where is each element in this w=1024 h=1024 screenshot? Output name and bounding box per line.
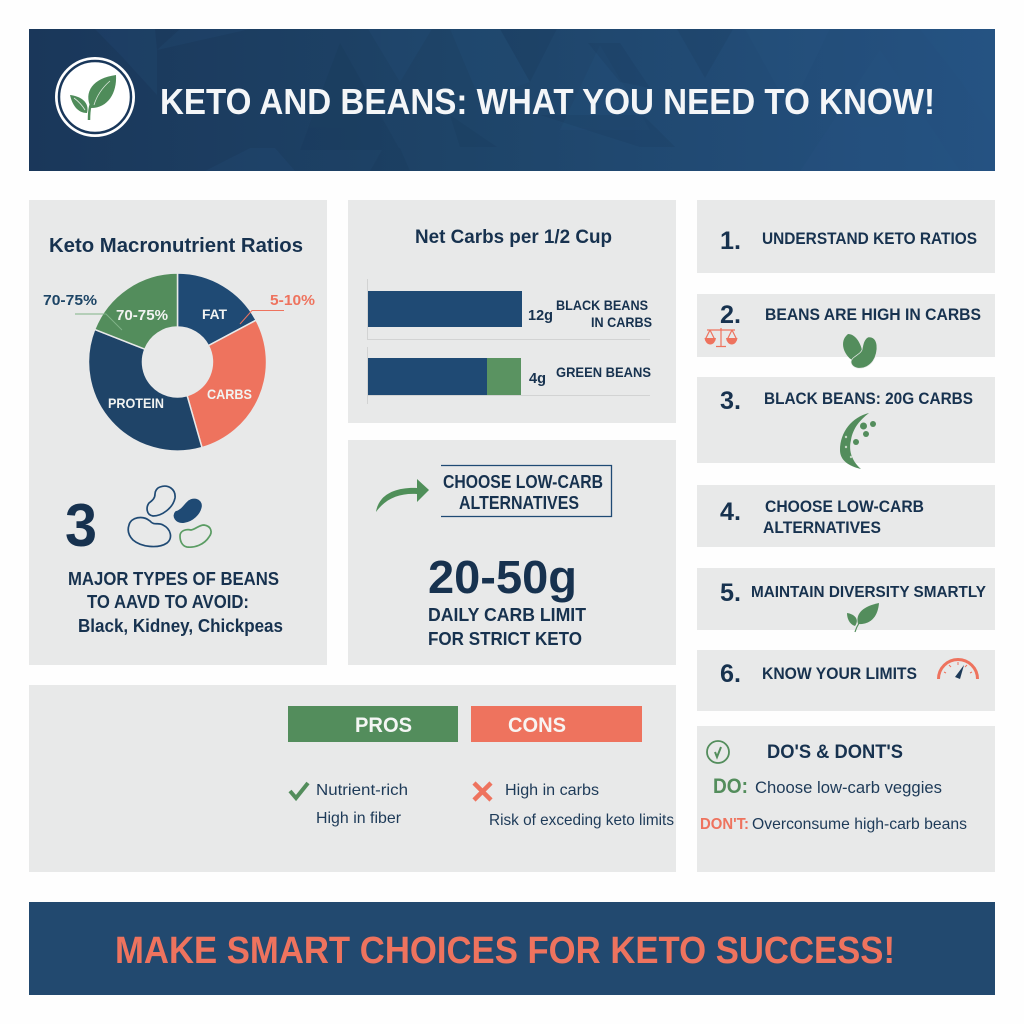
pros list bbox=[316, 782, 408, 827]
panel: keto macronutrient ratios bbox=[29, 200, 327, 665]
bar chart bbox=[368, 279, 652, 404]
do line: Choose low-carb veggies bbox=[755, 778, 942, 797]
donut labels bbox=[108, 306, 252, 411]
panel: step 4 bbox=[697, 485, 995, 547]
callout: 70-75% bbox=[43, 292, 122, 330]
icon: scale bbox=[704, 328, 738, 346]
donut labels: FAT bbox=[202, 306, 227, 322]
donut chart bbox=[88, 273, 267, 451]
do line: DO: bbox=[713, 775, 748, 798]
callout: 5-10%: 5-10% bbox=[270, 292, 315, 309]
do line bbox=[713, 775, 942, 798]
pros list: High in fiber bbox=[316, 810, 402, 827]
panel: step 4: ALTERNATIVES bbox=[763, 518, 881, 537]
icon: gauge bbox=[938, 660, 978, 679]
panel: step 3: 3. bbox=[720, 387, 741, 415]
bar: black beans bbox=[368, 291, 652, 330]
don't line: Overconsume high-carb beans bbox=[752, 816, 967, 833]
bar: black beans: IN CARBS bbox=[591, 314, 652, 330]
footer text: MAKE SMART CHOICES FOR KETO SUCCESS! bbox=[115, 930, 895, 972]
bar: black beans: 12g bbox=[528, 307, 553, 324]
donut labels: 70-75% bbox=[116, 307, 168, 324]
icon: beans bbox=[128, 486, 211, 547]
bar: green beans bbox=[368, 358, 651, 395]
icon: beans bbox=[843, 334, 877, 368]
pros list: Nutrient-rich bbox=[316, 782, 408, 799]
text: major types of beans: MAJOR TYPES OF BEANS bbox=[68, 569, 279, 589]
panel: net carbs bar chart bbox=[348, 200, 676, 423]
cons header: CONS bbox=[508, 714, 566, 737]
panel: step 4: 4. bbox=[720, 498, 741, 526]
donut labels: CARBS bbox=[207, 386, 252, 402]
callout: 70-75%: 70-75% bbox=[43, 292, 97, 309]
panel: step 2: BEANS ARE HIGH IN CARBS bbox=[765, 305, 981, 324]
cons list: Risk of exceding keto limits bbox=[489, 812, 674, 829]
text: daily carb limit bbox=[428, 605, 586, 649]
cons list: High in carbs bbox=[505, 782, 599, 799]
bar: green beans: GREEN BEANS bbox=[556, 364, 651, 380]
text: major types of beans: TO AAVD TO AVOID: bbox=[87, 592, 249, 612]
pros header bbox=[288, 706, 458, 742]
panel: step 5 bbox=[697, 568, 995, 632]
panel: step 6 bbox=[697, 650, 995, 711]
panel: step 1: 1. bbox=[720, 227, 741, 255]
text: major types of beans bbox=[68, 569, 283, 636]
text: daily carb limit: FOR STRICT KETO bbox=[428, 629, 582, 649]
bar: black beans: BLACK BEANS bbox=[556, 297, 648, 313]
donut labels: PROTEIN bbox=[108, 395, 164, 411]
panel: do's and don'ts bbox=[697, 726, 995, 872]
text: major types of beans: Black, Kidney, Chickpeas bbox=[78, 616, 283, 636]
pros header: PROS bbox=[355, 714, 412, 737]
footer banner bbox=[29, 902, 995, 995]
panel: low-carb alternatives and daily limit bbox=[348, 440, 676, 665]
heading: do's and don'ts: DO'S & DONT'S bbox=[767, 742, 903, 763]
don't line: DON'T: bbox=[700, 816, 749, 833]
icon: check bbox=[290, 783, 308, 798]
panel: step 3: BLACK BEANS: 20G CARBS bbox=[764, 389, 973, 408]
stat: 20-50g: 20-50g bbox=[428, 551, 577, 603]
icon: leaf bbox=[847, 603, 879, 632]
panel: step 1 bbox=[697, 200, 995, 273]
panel: step 3 bbox=[697, 377, 995, 469]
panel: step 1: UNDERSTAND KETO RATIOS bbox=[762, 229, 977, 248]
cons header bbox=[471, 706, 642, 742]
bar: green beans: 4g bbox=[529, 370, 546, 387]
text: daily carb limit: DAILY CARB LIMIT bbox=[428, 605, 586, 625]
panel: step 5: MAINTAIN DIVERSITY SMARTLY bbox=[751, 584, 986, 601]
panel: step 2: 2. bbox=[720, 301, 741, 329]
icon: green arrow bbox=[376, 479, 429, 512]
panel: step 2 bbox=[697, 294, 995, 368]
icon: cross bbox=[474, 783, 491, 800]
callout box: choose low-carb alternatives bbox=[441, 466, 612, 516]
title: KETO AND BEANS: WHAT YOU NEED TO KNOW! bbox=[160, 81, 935, 122]
callout: 5-10% bbox=[240, 292, 315, 324]
panel: step 6: 6. bbox=[720, 660, 741, 688]
header banner bbox=[29, 29, 995, 171]
panel: step 6: KNOW YOUR LIMITS bbox=[762, 664, 917, 683]
icon: leaf badge bbox=[55, 57, 135, 137]
panel: pros and cons bbox=[29, 685, 676, 872]
callout box: choose low-carb alternatives: CHOOSE LOW-CARB bbox=[443, 472, 603, 492]
panel: step 5: 5. bbox=[720, 579, 741, 607]
heading: net carbs: Net Carbs per 1/2 Cup bbox=[415, 227, 612, 248]
cons list bbox=[489, 782, 674, 829]
panel: step 4: CHOOSE LOW-CARB bbox=[765, 497, 924, 516]
callout box: choose low-carb alternatives: ALTERNATIVES bbox=[459, 493, 579, 513]
icon: pea pod bbox=[840, 413, 876, 469]
icon: circled check bbox=[707, 741, 729, 763]
heading: macronutrient ratios: Keto Macronutrient Ratios bbox=[49, 235, 303, 257]
big number 3: 3 bbox=[65, 492, 97, 559]
